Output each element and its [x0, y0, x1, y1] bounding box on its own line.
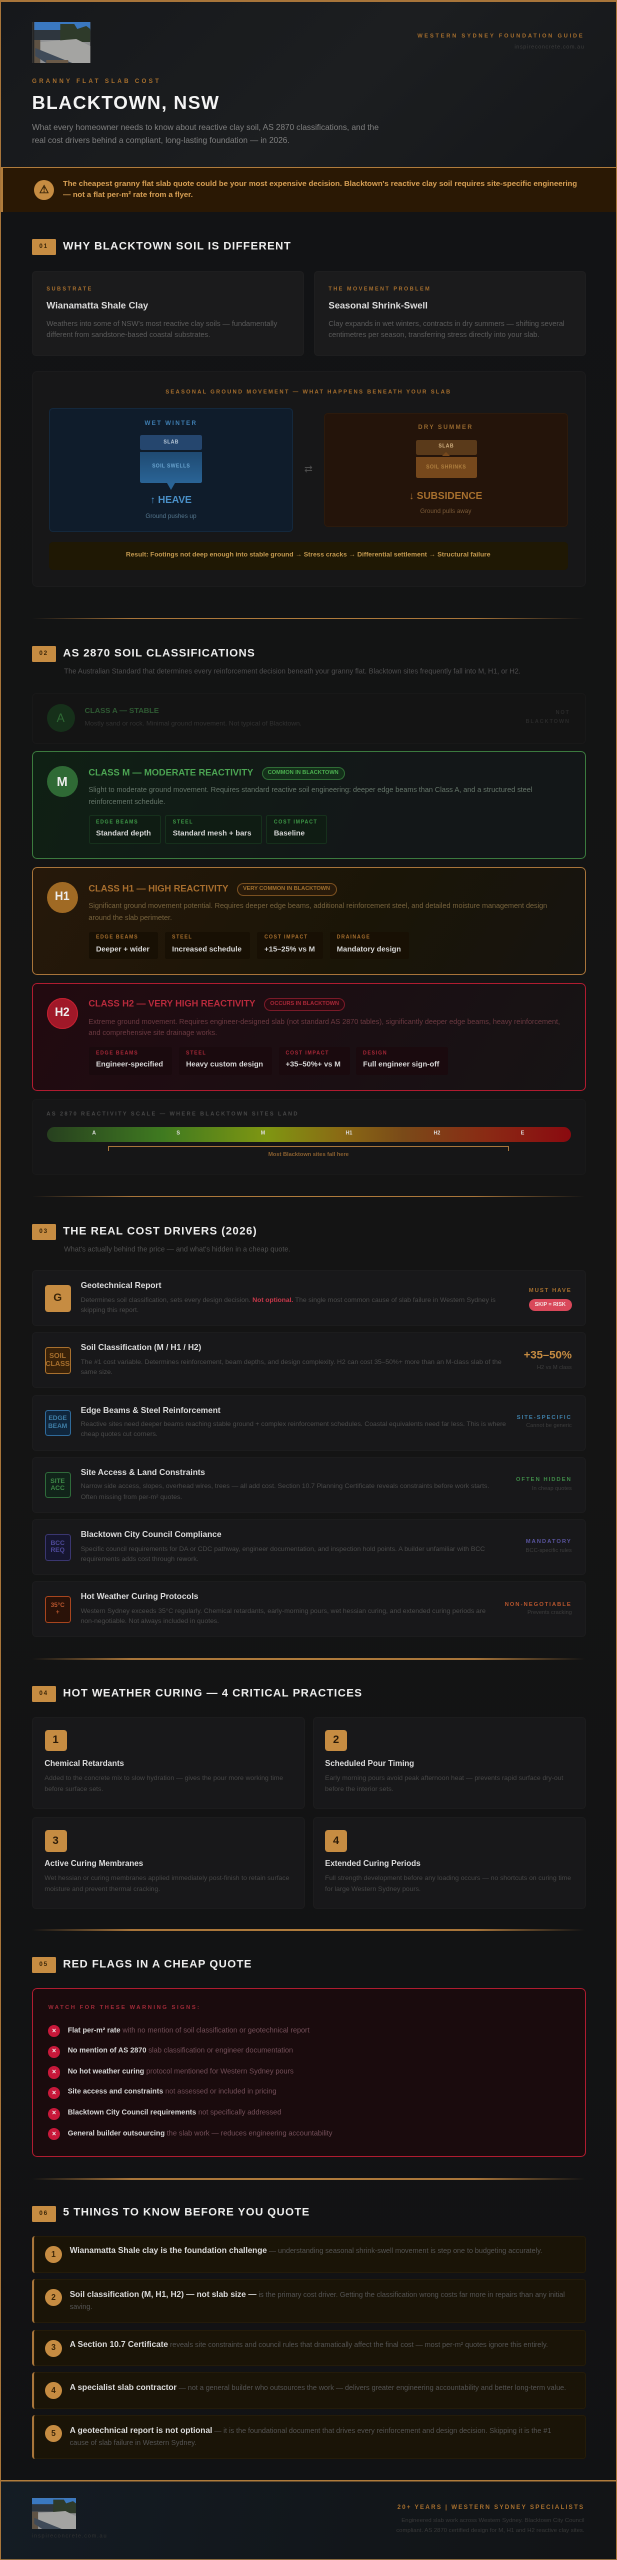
section badge 02: 02 — [39, 651, 48, 657]
warning text: — not a flat per-m² rate from a flyer. — [63, 190, 193, 199]
badge M: M — [57, 774, 68, 789]
label: DRY SUMMER — [418, 425, 473, 431]
website: inspireconcrete.com.au — [514, 44, 584, 50]
section badge 04 — [32, 1686, 56, 1702]
card text: centimetres per season, transferring stress directly into your slab. — [328, 330, 539, 339]
number: 2 — [333, 1734, 339, 1746]
spec: design: DESIGN — [363, 1050, 387, 1056]
heave label: ↑ HEAVE — [150, 495, 192, 506]
spec: steel — [165, 815, 262, 844]
row text: cheap quotes cut corners. — [81, 1431, 158, 1438]
item text: Soil classification (M, H1, H2) — not slab size — is the primary cost driver. Getting the classification wrong costs far more in repairs than any initial — [70, 2290, 565, 2299]
footer text: Engineered slab work across Western Sydney. Blacktown City Council — [401, 2518, 584, 2524]
spec: steel: Increased schedule — [172, 944, 242, 953]
spec: drainage: DRAINAGE — [337, 935, 370, 941]
icon: G — [44, 1285, 71, 1312]
label: WET WINTER — [145, 421, 197, 427]
row text: Determines soil classification, sets every design decision. Not optional. The single most common cause of slab failure in Western Sydney is — [81, 1297, 496, 1304]
row text — [81, 1483, 489, 1500]
pill — [262, 767, 345, 780]
heading 06: 5 THINGS TO KNOW BEFORE YOU QUOTE — [63, 2207, 310, 2219]
section intro: What's actually behind the price — and what's hidden in a cheap quote. — [64, 1246, 290, 1254]
spec: drainage — [330, 932, 409, 959]
row title: Geotechnical Report — [81, 1281, 161, 1290]
footer tagline: 20+ YEARS | WESTERN SYDNEY SPECIALISTS — [397, 2505, 584, 2511]
row title: Edge Beams & Steel Reinforcement — [81, 1406, 221, 1415]
subsidence label: ↓ SUBSIDENCE — [409, 491, 482, 502]
item text: A geotechnical report is not optional — it is the foundational document that drives every reinforcement and design decision. Skipping it is the #1 — [70, 2426, 551, 2435]
flag 4: Site access and constraints not assessed or included in pricing — [68, 2087, 276, 2096]
note: H2 vs M class — [537, 1365, 572, 1371]
number: 1 — [51, 2250, 56, 2258]
spec: design — [356, 1047, 448, 1075]
pill: COMMON IN BLACKTOWN — [268, 770, 339, 776]
icon: exchange arrows: ⇄ — [304, 464, 313, 475]
description — [88, 1017, 560, 1037]
note: Ground pushes up — [146, 513, 196, 520]
item 3 — [32, 2330, 586, 2366]
section badge 06 — [32, 2206, 56, 2222]
icon: soil class — [44, 1347, 71, 1374]
warning text — [63, 179, 577, 199]
tag: SITE-SPECIFIC — [517, 1415, 572, 1421]
item text — [70, 2290, 565, 2311]
flag 2: No mention of AS 2870 slab classification or engineer documentation — [68, 2046, 293, 2055]
card: curing membranes — [32, 1817, 304, 1909]
section badge 05 — [32, 1957, 56, 1973]
card text — [328, 319, 565, 339]
card text: different from sandstone-based coastal substrates. — [46, 330, 210, 339]
subtitle — [32, 123, 379, 145]
eyebrow: GRANNY FLAT SLAB COST — [32, 79, 161, 85]
panel: red flags — [32, 1988, 586, 2157]
card title: Chemical Retardants — [44, 1759, 124, 1768]
panel: substrate — [32, 271, 304, 356]
heading 04: HOT WEATHER CURING — 4 CRITICAL PRACTICES — [63, 1688, 362, 1700]
spec: edge beams: Deeper + wider — [96, 944, 150, 953]
icon: heat: + — [56, 1609, 59, 1616]
item text: Wianamatta Shale clay is the foundation challenge — understanding seasonal shrink-swell movement is step one to budgeting accurately. — [70, 2246, 542, 2255]
row text: Often missing from per-m² quotes. — [81, 1494, 182, 1500]
section badge 06: 06 — [39, 2211, 48, 2217]
card title: Extended Curing Periods — [325, 1859, 421, 1868]
note: Cannot be generic — [526, 1423, 572, 1429]
not blacktown tag: NOT — [556, 710, 570, 716]
row text — [80, 1608, 486, 1625]
card: chemical retardants — [32, 1717, 304, 1809]
spec: steel: STEEL — [173, 819, 193, 825]
item text — [70, 2426, 551, 2447]
item 5 — [32, 2415, 586, 2459]
panel title: WATCH FOR THESE WARNING SIGNS: — [48, 2006, 201, 2012]
card text: for large Western Sydney pours. — [325, 1886, 421, 1893]
icon: edge beam: EDGE — [48, 1415, 67, 1422]
scale title: AS 2870 REACTIVITY SCALE — WHERE BLACKTOWN SITES LAND — [46, 1112, 299, 1118]
tag: NON-NEGOTIABLE — [505, 1602, 572, 1608]
card text: moisture and prevent thermal cracking. — [44, 1886, 160, 1893]
row text: requirements adds cost through rework. — [81, 1556, 199, 1563]
row text — [81, 1546, 485, 1563]
label M: M — [261, 1130, 265, 1136]
panel: reactivity scale — [32, 1099, 586, 1175]
spec: steel: Heavy custom design — [186, 1060, 263, 1069]
badge M — [47, 766, 78, 797]
icon: edge beam — [44, 1410, 71, 1436]
number: 3 — [52, 1835, 59, 1847]
section badge 01 — [32, 239, 56, 255]
footer text — [396, 2518, 584, 2534]
card: scheduled pour — [312, 1717, 586, 1809]
row text: Narrow side access, slopes, overhead wires, trees — all add cost. Section 10.7 Planning Certificate reveals constraints before work starts. — [81, 1483, 489, 1490]
spec: cost: +35–50%+ vs M — [286, 1060, 341, 1069]
spec: cost: COST IMPACT — [286, 1050, 329, 1056]
card text: Weathers into some of NSW's most reactive clay soils — fundamentally — [46, 319, 277, 328]
icon: council — [44, 1534, 71, 1561]
number — [44, 1730, 66, 1751]
label A: A — [92, 1130, 96, 1136]
risk pill — [528, 1299, 572, 1311]
flag 6: × — [52, 2131, 56, 2138]
footer website: inspireconcrete.com.au — [32, 2534, 107, 2540]
number: 4 — [333, 1835, 339, 1847]
panel: class H2 — [32, 983, 586, 1091]
flag 1: × — [52, 2028, 56, 2035]
spec: steel — [179, 1047, 272, 1075]
note: BCC-specific rules — [526, 1548, 572, 1554]
item text: saving. — [70, 2303, 92, 2311]
spec: cost — [257, 932, 323, 959]
number — [325, 1730, 347, 1751]
heading 01: WHY BLACKTOWN SOIL IS DIFFERENT — [63, 240, 291, 252]
flag 6: General builder outsourcing the slab work — reduces engineering accountability — [68, 2128, 332, 2137]
description — [88, 901, 547, 922]
row text: The #1 cost variable. Determines reinforcement, beam depths, and design complexity. H2 can cost 35–50%+ more than an M-class slab of the — [81, 1359, 502, 1366]
card title: Active Curing Membranes — [44, 1859, 143, 1868]
icon: council: REQ — [51, 1547, 65, 1554]
icon: site access: ACC — [51, 1485, 65, 1492]
header — [0, 0, 617, 167]
not blacktown tag: BLACKTOWN — [526, 719, 570, 725]
spec: edge beams — [89, 1047, 172, 1075]
note: Ground pulls away — [420, 508, 471, 515]
pill: OCCURS IN BLACKTOWN — [270, 1001, 339, 1007]
icon: site access: SITE — [50, 1478, 65, 1485]
cost number: +35–50% — [524, 1350, 572, 1362]
flag 5: × — [52, 2110, 56, 2117]
reactivity bar — [46, 1127, 570, 1142]
row: site access — [32, 1457, 586, 1513]
title: CLASS H1 — HIGH REACTIVITY — [88, 883, 228, 893]
card text: Added to the concrete mix to slow hydration — gives the pour more working time — [44, 1775, 283, 1782]
item text: A Section 10.7 Certificate reveals site constraints and council rules that dramatically affect the final cost — most per-m² quotes ignore this entirely. — [70, 2340, 548, 2349]
spec: steel: Standard mesh + bars — [173, 828, 251, 837]
badge H2: H2 — [55, 1007, 70, 1019]
row: soil classification — [32, 1332, 586, 1388]
row text: same size. — [81, 1369, 113, 1376]
soil block — [416, 457, 477, 478]
number — [45, 2246, 62, 2263]
section badge 02 — [32, 646, 56, 662]
spec: edge beams: EDGE BEAMS — [96, 819, 138, 825]
title: BLACKTOWN, NSW — [32, 91, 220, 112]
slab block: SLAB — [163, 439, 179, 445]
label: SUBSTRATE — [46, 286, 93, 292]
number — [45, 2340, 62, 2357]
section badge 05: 05 — [39, 1962, 48, 1968]
icon: warning — [34, 180, 54, 200]
number: 4 — [51, 2386, 56, 2395]
flag 6 — [48, 2128, 332, 2140]
item text: A specialist slab contractor — not a general builder who outsources the work — delivers greater engineering accountability and better long-term value. — [70, 2383, 566, 2392]
soil block — [140, 452, 202, 483]
card text: Full strength development before any loading occurs — no shortcuts on curing time — [325, 1875, 571, 1882]
risk pill: SKIP = RISK — [535, 1302, 566, 1308]
row title: Soil Classification (M / H1 / H2) — [81, 1343, 201, 1352]
description: Extreme ground movement. Requires engineer-designed slab (not standard AS 2870 tables), significantly deeper edge beams, heavy reinforcement, — [88, 1017, 560, 1026]
row text: non-negotiable. Not always included in quotes. — [81, 1618, 219, 1625]
subtitle: What every homeowner needs to know about reactive clay soil, AS 2870 classifications, and the — [32, 123, 379, 132]
spec: cost: COST IMPACT — [264, 935, 308, 941]
badge A: A — [57, 711, 65, 725]
row text: skipping this report. — [81, 1307, 139, 1314]
number — [325, 1830, 347, 1852]
heading 02: AS 2870 SOIL CLASSIFICATIONS — [63, 647, 255, 659]
heading 03: THE REAL COST DRIVERS (2026) — [63, 1225, 257, 1237]
footer text: compliant. AS 2870 certified design for M, H1 and H2 reactive clay sites. — [396, 2528, 584, 2534]
section intro: The Australian Standard that determines every reinforcement decision beneath your granny flat. Blacktown sites frequently fall into M, H1, or H2. — [64, 668, 521, 676]
soil block: SOIL SHRINKS — [426, 464, 466, 470]
card text: before surface sets. — [44, 1786, 103, 1793]
panel: seasonal ground movement — [32, 371, 586, 587]
label H2: H2 — [434, 1130, 440, 1136]
label: THE MOVEMENT PROBLEM — [328, 286, 431, 292]
spec: drainage: Mandatory design — [337, 944, 401, 953]
spec: edge beams — [88, 815, 160, 844]
spec: edge beams: Engineer-specified — [96, 1060, 163, 1069]
card text: Clay expands in wet winters, contracts in dry summers — shifting several — [328, 319, 565, 328]
item 1 — [32, 2236, 586, 2273]
number: 2 — [51, 2293, 56, 2302]
flag 5 — [48, 2107, 281, 2120]
icon: heat — [44, 1596, 71, 1623]
warning banner — [0, 167, 617, 212]
spec: steel: STEEL — [186, 1050, 206, 1056]
label S: S — [177, 1130, 180, 1136]
spec: edge beams: EDGE BEAMS — [96, 1050, 138, 1056]
spec: cost: +15–25% vs M — [264, 944, 315, 953]
tag: MANDATORY — [526, 1540, 572, 1546]
tag: MUST HAVE — [529, 1288, 572, 1294]
item 4 — [32, 2372, 586, 2409]
result callout: Result: Footings not deep enough into stable ground → Stress cracks → Differential settlement → Structural failure — [126, 552, 490, 559]
section badge 03: 03 — [39, 1229, 48, 1235]
icon: council: BCC — [51, 1540, 65, 1547]
flag 2 — [48, 2046, 293, 2058]
slab block — [416, 440, 477, 455]
flag 5: Blacktown City Council requirements not specifically addressed — [68, 2107, 281, 2116]
badge A — [47, 704, 75, 732]
spec: steel — [165, 932, 250, 959]
card text: Wet hessian or curing membranes applied immediately post-finish to retain surface — [44, 1875, 289, 1882]
slab block — [140, 435, 202, 450]
warning text: The cheapest granny flat slab quote could be your most expensive decision. Blacktown's reactive clay soil requires site-specific engineering — [63, 179, 577, 188]
card text — [44, 1775, 283, 1793]
icon: soil class: CLASS — [45, 1359, 70, 1368]
description — [88, 785, 532, 806]
description: reinforcement schedule. — [88, 797, 165, 806]
subtitle: real cost drivers behind a compliant, long-lasting foundation — in 2026. — [32, 136, 290, 145]
card text: Early morning pours avoid peak afternoon heat — prevents rapid surface dry-out — [325, 1775, 563, 1782]
icon: heat: 35°C — [51, 1602, 65, 1609]
pill: VERY COMMON IN BLACKTOWN — [243, 886, 330, 892]
icon: edge beam: BEAM — [48, 1423, 67, 1430]
card title: Scheduled Pour Timing — [325, 1759, 414, 1768]
flag 1: Flat per-m² rate with no mention of soil classification or geotechnical report — [68, 2025, 309, 2034]
row text — [80, 1359, 502, 1376]
spec: steel: STEEL — [172, 935, 192, 941]
description: and comprehensive site drainage works. — [88, 1028, 217, 1037]
title: CLASS M — MODERATE REACTIVITY — [88, 767, 253, 777]
description: Slight to moderate ground movement. Requires standard reactive soil engineering: deeper edge beams than Class A, and a structured steel — [88, 785, 532, 794]
section badge 03 — [32, 1224, 56, 1240]
title: CLASS H2 — VERY HIGH REACTIVITY — [88, 999, 255, 1009]
flag 3: No hot weather curing protocol mentioned for Western Sydney pours — [68, 2066, 294, 2075]
row text: Reactive sites need deeper beams reaching stable ground + complex reinforcement schedules. Coastal equivalents need far less. This is where — [81, 1421, 506, 1428]
row: edge beams — [32, 1395, 586, 1451]
row text — [81, 1421, 506, 1438]
number: 3 — [51, 2343, 56, 2352]
flag 2: × — [52, 2048, 56, 2055]
row: geotechnical report — [32, 1270, 586, 1326]
panel: class M — [32, 751, 586, 859]
spec: design: Full engineer sign-off — [363, 1060, 439, 1069]
description: Mostly sand or rock. Minimal ground movement. Not typical of Blacktown. — [85, 721, 302, 728]
spec: cost: Baseline — [274, 828, 305, 837]
pill — [236, 883, 336, 896]
card: extended curing — [312, 1817, 586, 1909]
tag: OFTEN HIDDEN — [516, 1477, 572, 1483]
note: In cheap quotes — [532, 1486, 572, 1492]
card text — [325, 1875, 571, 1893]
description: around the slab perimeter. — [88, 913, 172, 922]
soil block: SOIL SWELLS — [152, 464, 190, 470]
footer — [0, 2480, 617, 2560]
spec: cost: COST IMPACT — [274, 819, 318, 825]
result callout — [48, 542, 568, 570]
card text — [44, 1875, 289, 1893]
flag 4: × — [52, 2090, 56, 2097]
arrow: up push — [167, 483, 175, 490]
arrow: pull — [442, 452, 450, 456]
badge H1: H1 — [55, 891, 70, 903]
row text: Specific council requirements for DA or CDC pathway, engineer documentation, and inspection hold points. A builder unfamiliar with BCC — [81, 1546, 485, 1553]
label H1: H1 — [346, 1130, 352, 1136]
section badge 04: 04 — [39, 1691, 48, 1697]
logo photo — [32, 22, 90, 63]
diagram title: SEASONAL GROUND MOVEMENT — WHAT HAPPENS BENEATH YOUR SLAB — [165, 389, 452, 395]
flag 3: × — [52, 2069, 56, 2076]
guide label: WESTERN SYDNEY FOUNDATION GUIDE — [417, 33, 584, 39]
flag 1 — [48, 2025, 310, 2037]
panel: class H1 — [32, 867, 586, 975]
number — [45, 2425, 62, 2442]
flag 4 — [48, 2087, 276, 2099]
row: hot weather protocols — [32, 1581, 586, 1637]
pill — [264, 998, 345, 1011]
card title: Wianamatta Shale Clay — [46, 301, 148, 311]
spec: edge beams — [89, 932, 158, 959]
number — [45, 2382, 62, 2399]
spec: edge beams: EDGE BEAMS — [96, 935, 138, 941]
not blacktown tag — [526, 710, 570, 725]
item text: cause of slab failure in Western Sydney. — [70, 2439, 196, 2447]
panel: class A — [32, 693, 586, 744]
row text — [81, 1297, 496, 1314]
card title: Seasonal Shrink-Swell — [328, 301, 428, 311]
item 2 — [32, 2279, 586, 2323]
panel: dry summer — [324, 413, 568, 527]
row: council compliance — [32, 1519, 586, 1575]
row title: Hot Weather Curing Protocols — [81, 1592, 198, 1601]
bracket label: Most Blacktown sites fall here — [268, 1152, 349, 1158]
section badge 01: 01 — [39, 244, 48, 250]
slab block: SLAB — [438, 444, 454, 450]
row title: Blacktown City Council Compliance — [81, 1530, 221, 1539]
card text — [325, 1775, 564, 1793]
badge H1 — [47, 882, 78, 913]
panel: wet winter — [49, 408, 293, 532]
title: CLASS A — STABLE — [85, 706, 159, 715]
card text: before the interior sets. — [325, 1786, 393, 1793]
description: Significant ground movement potential. Requires deeper edge beams, additional reinforcement steel, and detailed moisture management design — [88, 901, 547, 910]
icon: G: G — [53, 1292, 62, 1304]
number — [45, 2289, 62, 2306]
card text — [46, 319, 278, 339]
row text: Western Sydney exceeds 35°C regularly. Chemical retardants, early-morning pours, wet hessian curing, and extended curing periods are — [81, 1608, 486, 1615]
icon: site access — [44, 1472, 71, 1498]
footer logo — [32, 2498, 76, 2529]
spec: cost — [266, 815, 327, 844]
panel: movement problem — [314, 271, 586, 356]
spec: cost — [279, 1047, 350, 1075]
label E: E — [521, 1130, 524, 1136]
number: 5 — [51, 2429, 56, 2438]
flag 3 — [48, 2066, 294, 2079]
icon: warning: ⚠ — [39, 184, 49, 196]
badge H2 — [47, 998, 78, 1029]
note: Prevents cracking — [527, 1610, 572, 1616]
number — [44, 1830, 66, 1852]
spec: edge beams: Standard depth — [96, 828, 151, 837]
bracket — [108, 1146, 509, 1151]
heading 05: RED FLAGS IN A CHEAP QUOTE — [63, 1958, 252, 1970]
icon: soil class: SOIL — [49, 1351, 66, 1360]
number: 1 — [52, 1734, 59, 1746]
row title: Site Access & Land Constraints — [81, 1468, 205, 1477]
